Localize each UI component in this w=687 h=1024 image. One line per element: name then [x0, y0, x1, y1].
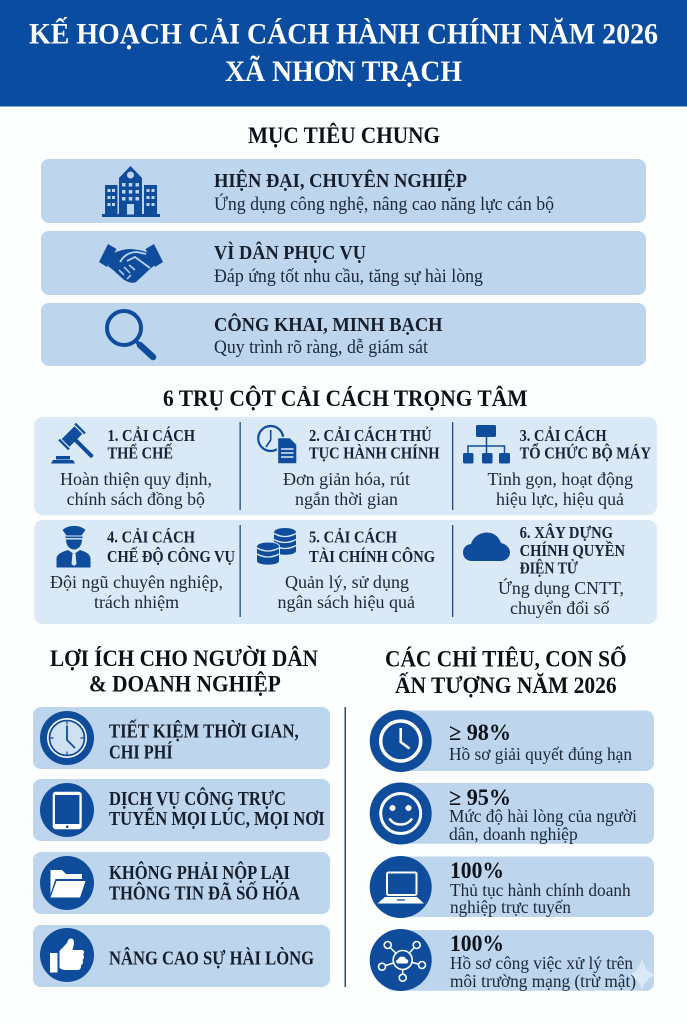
panel: target online procedures: 100% — [450, 858, 504, 883]
panel: pillars row 1 — [34, 417, 657, 515]
goal text: Quy trình rõ ràng, dễ giám sát — [214, 338, 429, 358]
icon: organization chart — [463, 425, 510, 464]
goal text: Ứng dụng công nghệ, nâng cao năng lực cán bộ — [214, 193, 554, 215]
panel: pillars row 2 — [34, 520, 657, 624]
pillar 6: CHÍNH QUYỀN — [520, 541, 625, 560]
panel: benefit satisfaction — [33, 925, 330, 987]
icon: building — [102, 166, 160, 217]
panel: benefit no resubmission: THÔNG TIN ĐÃ SỐ HÓA — [109, 883, 300, 905]
goal heading: VÌ DÂN PHỤC VỤ — [214, 242, 366, 264]
panel: target satisfaction: dân, doanh nghiệp — [449, 824, 578, 844]
heading: targets: ẤN TƯỢNG NĂM 2026 — [395, 672, 617, 698]
icon: magnifier — [107, 311, 153, 357]
icon: thumbs up — [40, 928, 94, 982]
panel: target on-time — [370, 710, 654, 772]
pillar 4 — [50, 526, 235, 612]
panel: goal transparency — [41, 303, 646, 366]
pillar 5: ngân sách hiệu quả — [278, 592, 415, 612]
panel: target online records — [370, 929, 656, 991]
icon: clock and document — [258, 426, 297, 464]
pillar 2 — [258, 426, 440, 509]
panel: benefit online services: DỊCH VỤ CÔNG TRỰC — [109, 788, 286, 810]
icon: clock — [40, 711, 94, 765]
panel: benefit no resubmission: KHÔNG PHẢI NỘP LẠI — [109, 862, 290, 884]
panel: benefit saving time: TIẾT KIỆM THỜI GIAN, — [109, 721, 299, 743]
icon: gavel — [51, 423, 101, 466]
icon: laptop — [370, 856, 432, 918]
pillar 2: 2. CẢI CÁCH THỦ — [309, 426, 432, 445]
pillar 3: 3. CẢI CÁCH — [520, 426, 607, 445]
icon: tablet — [40, 783, 94, 837]
panel: target on-time: ≥ 98% — [449, 720, 511, 745]
icon: cloud — [463, 532, 510, 561]
pillar 5: 5. CẢI CÁCH — [309, 528, 397, 547]
icon: folder — [40, 856, 94, 910]
icon: handshake — [99, 244, 163, 283]
panel: target satisfaction: ≥ 95% — [449, 785, 511, 810]
pillar 4: trách nhiệm — [94, 592, 179, 612]
header banner — [0, 0, 687, 106]
pillar 4: 4. CẢI CÁCH — [107, 528, 195, 547]
panel: benefit online services: TUYẾN MỌI LÚC, MỌI NƠI — [109, 808, 325, 830]
panel: target satisfaction: Mức độ hài lòng của người — [449, 806, 637, 826]
goal heading: HIỆN ĐẠI, CHUYÊN NGHIỆP — [214, 170, 467, 192]
panel: benefit saving time — [33, 707, 330, 769]
icon: corner sparkle — [628, 958, 656, 990]
pillar 2: TỤC HÀNH CHÍNH — [309, 444, 440, 463]
pillar 1: chính sách đồng bộ — [67, 489, 205, 509]
panel: benefit no resubmission — [33, 852, 330, 914]
panel: target satisfaction — [370, 782, 654, 844]
pillar 2: ngắn thời gian — [295, 489, 398, 509]
pillar 6 — [463, 523, 625, 618]
panel: benefit saving time: CHI PHÍ — [109, 741, 173, 763]
heading: targets — [385, 646, 627, 698]
panel: target online records: Hồ sơ công việc xử lý trên — [450, 953, 633, 973]
pillar 1: 1. CẢI CÁCH — [108, 426, 195, 445]
pillar 6: 6. XÂY DỰNG — [520, 523, 613, 542]
panel: target online records: 100% — [450, 931, 504, 956]
icon: coin stacks — [256, 528, 296, 565]
pillar 1: THỂ CHẾ — [108, 444, 173, 463]
heading: benefits — [50, 645, 318, 697]
icon: smiley — [370, 782, 432, 844]
panel: target online procedures — [370, 856, 654, 918]
panel: target online procedures: Thủ tục hành chính doanh — [450, 880, 631, 900]
panel: target online records: môi trường mạng (trừ mật) — [450, 971, 636, 991]
panel: benefit satisfaction: NÂNG CAO SỰ HÀI LÒNG — [109, 948, 314, 970]
panel: target online procedures: nghiệp trực tuyến — [450, 897, 571, 917]
goal text: Đáp ứng tốt nhu cầu, tăng sự hài lòng — [214, 267, 483, 287]
pillar 5: TÀI CHÍNH CÔNG — [309, 547, 435, 566]
pillar 3 — [463, 425, 651, 509]
heading: benefits: LỢI ÍCH CHO NGƯỜI DÂN — [50, 645, 318, 671]
panel: goal modern professional — [41, 159, 646, 223]
pillar 6: ĐIỆN TỬ — [520, 559, 578, 578]
icon: officer — [56, 526, 90, 568]
pillar 3: Tinh gọn, hoạt động — [488, 469, 633, 489]
pillar 1 — [51, 423, 212, 509]
heading: targets: CÁC CHỈ TIÊU, CON SỐ — [385, 646, 627, 672]
pillar 1: Hoàn thiện quy định, — [60, 469, 212, 489]
heading: general goals: MỤC TIÊU CHUNG — [248, 122, 440, 148]
pillar 3: hiệu lực, hiệu quả — [496, 489, 624, 509]
icon: clock — [370, 710, 432, 772]
pillar 6: Ứng dụng CNTT, — [498, 578, 624, 598]
title: KẾ HOẠCH CẢI CÁCH HÀNH CHÍNH NĂM 2026 — [29, 16, 658, 50]
heading: benefits: & DOANH NGHIỆP — [89, 672, 281, 697]
pillar 5: Quản lý, sử dụng — [285, 572, 409, 592]
goal heading: CÔNG KHAI, MINH BẠCH — [214, 314, 442, 336]
pillar 4: Đội ngũ chuyên nghiệp, — [50, 572, 223, 592]
pillar 3: TỔ CHỨC BỘ MÁY — [520, 443, 651, 463]
pillar 6: chuyển đổi số — [510, 598, 610, 618]
title — [29, 16, 658, 88]
heading: six pillars: 6 TRỤ CỘT CẢI CÁCH TRỌNG TÂM — [163, 385, 528, 411]
title: XÃ NHƠN TRẠCH — [225, 55, 462, 88]
pillar 4: CHẾ ĐỘ CÔNG VỤ — [107, 547, 235, 566]
panel: benefit online services — [33, 779, 330, 841]
pillar 5 — [256, 528, 435, 612]
panel: goal serving citizens — [41, 231, 646, 295]
pillar 2: Đơn giản hóa, rút — [283, 469, 410, 489]
icon: network — [370, 929, 432, 991]
panel: target on-time: Hồ sơ giải quyết đúng hạn — [449, 744, 632, 764]
